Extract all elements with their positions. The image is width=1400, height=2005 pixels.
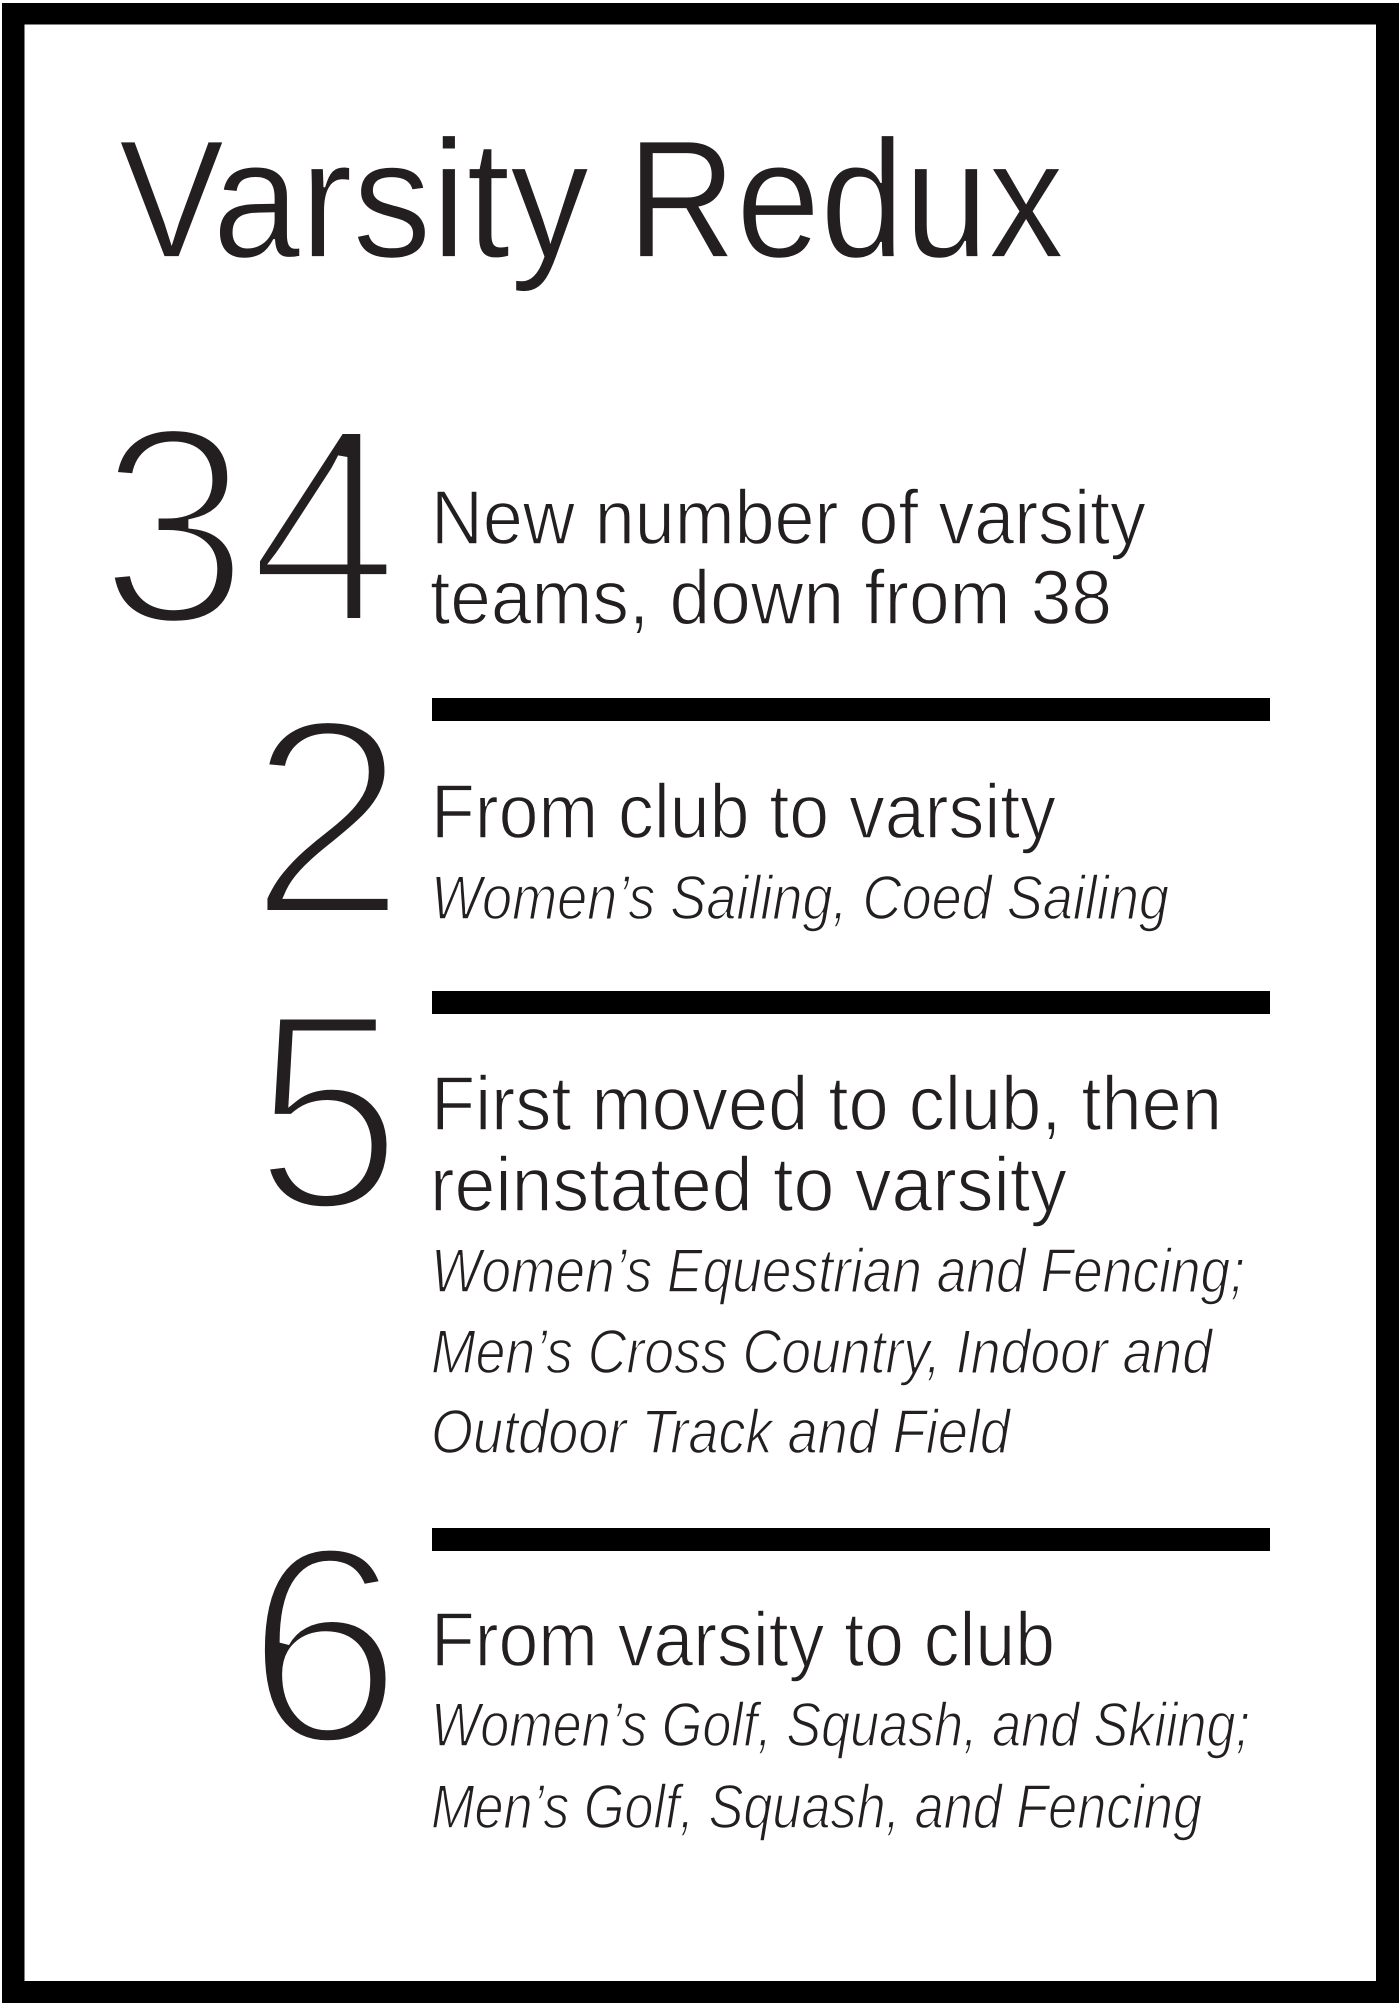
description: Women’s Equestrian and Fencing;: [431, 1237, 1245, 1306]
description: Men’s Golf, Squash, and Fencing: [431, 1773, 1202, 1842]
description: Women’s Golf, Squash, and Skiing;: [431, 1691, 1250, 1760]
description: New number of varsity: [431, 475, 1146, 561]
description: From varsity to club: [431, 1597, 1055, 1683]
number 6: 6: [246, 1488, 403, 1802]
stat: 6 from varsity to club: [246, 1488, 1250, 1842]
title: Varsity: [119, 105, 589, 293]
description: [430, 475, 1146, 641]
stat: 34 varsity teams: [99, 368, 1146, 683]
description: Women’s Sailing, Coed Sailing: [431, 864, 1169, 933]
divider: [432, 698, 1270, 721]
stat: 2 from club to varsity: [248, 660, 1169, 975]
description: Outdoor Track and Field: [431, 1398, 1012, 1467]
description: reinstated to varsity: [430, 1142, 1067, 1228]
description: First moved to club, then: [431, 1061, 1222, 1147]
divider: [432, 1528, 1270, 1551]
number 34: 34: [99, 368, 399, 683]
description: From club to varsity: [431, 769, 1056, 855]
divider: [432, 991, 1270, 1014]
number 2: 2: [248, 660, 407, 975]
title: [119, 105, 1064, 293]
title: Redux: [627, 105, 1064, 293]
number 5: 5: [254, 954, 402, 1268]
description: [431, 769, 1169, 933]
description: [430, 1061, 1245, 1467]
stat: 5 moved then reinstated: [254, 954, 1245, 1467]
description: Men’s Cross Country, Indoor and: [431, 1318, 1214, 1387]
description: [431, 1597, 1250, 1842]
description: teams, down from 38: [430, 555, 1112, 641]
